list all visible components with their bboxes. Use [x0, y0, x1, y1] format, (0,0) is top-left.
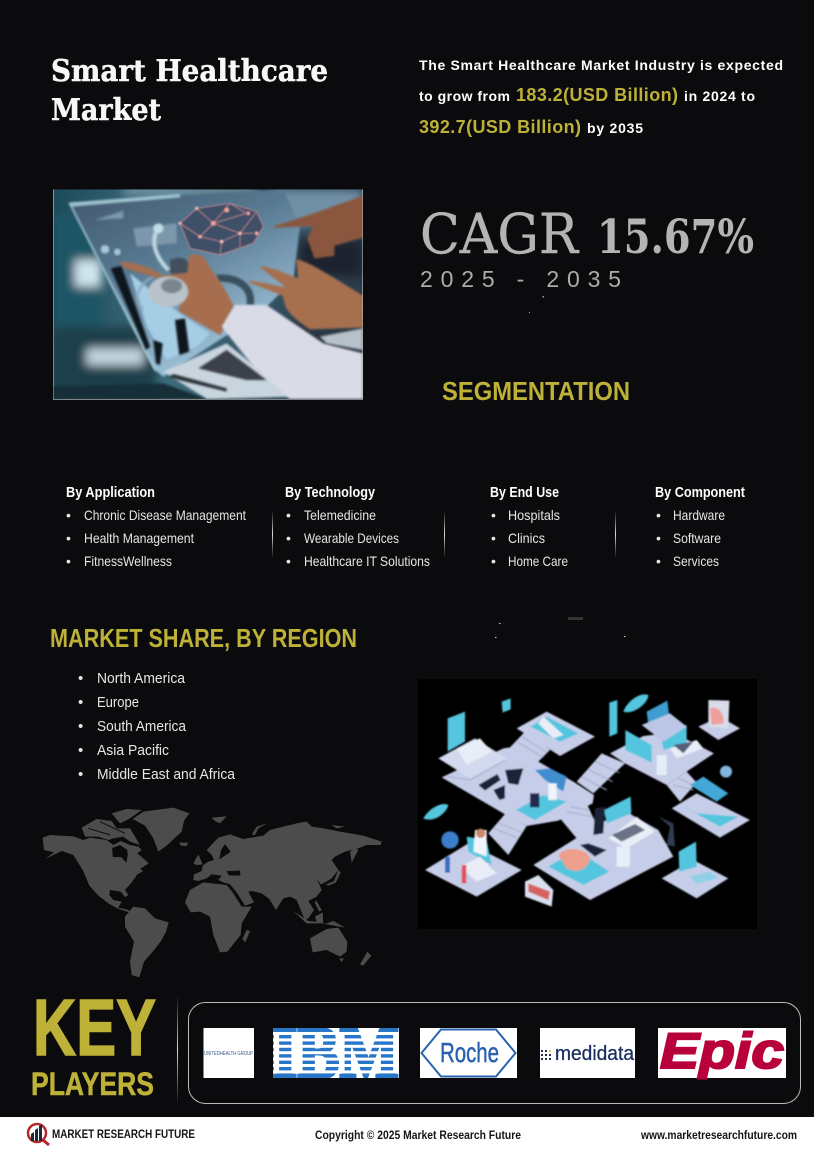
segmentation: by end use: By End Use	[490, 485, 559, 501]
region list: Europe	[97, 694, 139, 711]
eurasia	[193, 822, 382, 920]
region list: Middle East and Africa	[97, 766, 236, 783]
logo: Epic: Epic	[660, 1023, 784, 1079]
white sleeve	[222, 305, 363, 399]
madagascar	[242, 930, 250, 942]
logo: IBM	[273, 1028, 399, 1078]
footer bar	[0, 1117, 814, 1150]
segmentation: by component	[655, 485, 745, 569]
segmentation: by end use: •	[491, 553, 496, 569]
islands of europe and asia	[193, 823, 358, 886]
title	[51, 54, 328, 128]
market forecast text: by 2035	[587, 120, 643, 136]
title: Smart Healthcare	[51, 54, 328, 89]
photo: doctor with stethoscope and laptop	[53, 189, 363, 400]
key players heading	[31, 983, 156, 1102]
screen data marks	[95, 211, 177, 247]
white objects	[457, 700, 729, 882]
region list: •	[78, 670, 83, 687]
iceland and svalbard	[179, 816, 227, 846]
footer bar: Copyright © 2025 Market Research Future	[315, 1128, 521, 1142]
logo: medidata	[540, 1028, 635, 1078]
brain and jar	[558, 849, 590, 871]
region list: •	[78, 718, 83, 735]
logo: Roche: Roche	[440, 1037, 499, 1068]
segmentation: by end use: Clinics	[508, 530, 545, 546]
CAGR figure	[420, 202, 754, 266]
africa	[185, 882, 252, 952]
logo: medidata: medidata	[555, 1043, 635, 1065]
segmentation: by application: •	[66, 507, 71, 523]
south america	[125, 907, 169, 977]
heading: segmentation: SEGMENTATION	[442, 376, 630, 406]
segmentation: by technology: By Technology	[285, 485, 375, 501]
segmentation: by technology: •	[286, 530, 291, 546]
isometric smart healthcare illustration	[418, 679, 757, 929]
region list: •	[78, 766, 83, 783]
seated figures and dark equipment	[478, 742, 693, 857]
right pointing hand	[275, 197, 363, 257]
segmentation: by component: •	[656, 507, 661, 523]
segmentation: by end use: Hospitals	[508, 507, 560, 523]
segmentation: by end use: Home Care	[508, 553, 568, 569]
brain network	[178, 203, 263, 255]
key players heading: KEY	[33, 983, 156, 1072]
segmentation: by component: Software	[673, 530, 721, 546]
market forecast text: to grow from	[419, 88, 510, 104]
specks	[529, 296, 544, 313]
segmentation: by component: Hardware	[673, 507, 725, 523]
laptop screen	[68, 189, 300, 377]
title: Market	[51, 93, 161, 128]
segmentation: by technology: Wearable Devices	[304, 530, 399, 546]
segmentation: by component: •	[656, 553, 661, 569]
footer bar: MARKET RESEARCH FUTURE	[52, 1127, 195, 1141]
region list: •	[78, 742, 83, 759]
CAGR figure: CAGR	[420, 202, 579, 266]
key players heading: PLAYERS	[31, 1066, 154, 1102]
segmentation: by component: •	[656, 530, 661, 546]
stethoscope chest piece	[148, 276, 188, 307]
segmentation: by application: By Application	[66, 485, 155, 501]
segmentation: by technology: Telemedicine	[304, 507, 376, 523]
region list	[78, 670, 236, 783]
segmentation: by technology: •	[286, 507, 291, 523]
logo: unitedhealth group: UNITEDHEALTH GROUP	[204, 1051, 253, 1057]
inland seas	[88, 822, 240, 875]
arctic islands	[82, 809, 142, 845]
segmentation: by end use: •	[491, 507, 496, 523]
hand holding stethoscope	[122, 255, 233, 334]
segmentation: by component: Services	[673, 553, 719, 569]
segmentation: by application	[66, 485, 246, 569]
stair shading	[447, 737, 693, 838]
market forecast text: 183.2(USD Billion)	[516, 85, 678, 105]
people	[473, 830, 487, 857]
segmentation: by application: •	[66, 530, 71, 546]
logo: Roche	[420, 1028, 517, 1078]
segmentation: by technology: Healthcare IT Solutions	[304, 553, 430, 569]
australia and new zealand	[310, 928, 371, 966]
cyan panels and screens	[423, 694, 738, 885]
market forecast text	[419, 57, 783, 137]
right open hand	[250, 261, 363, 328]
region list: North America	[97, 670, 186, 687]
segmentation: by application: FitnessWellness	[84, 553, 172, 569]
stethoscope	[138, 223, 250, 310]
heading: market share by region: MARKET SHARE, BY REGION	[50, 623, 357, 653]
southeast asia islands	[293, 900, 345, 928]
segmentation: by component: By Component	[655, 485, 745, 501]
market forecast text: The Smart Healthcare Market Industry is expected	[419, 57, 783, 73]
north america	[43, 835, 149, 912]
platforms	[425, 712, 750, 900]
logo: unitedhealth group	[204, 1028, 254, 1078]
segmentation: by technology: •	[286, 553, 291, 569]
segmentation: by application: Chronic Disease Management	[84, 507, 246, 523]
logo: IBM: IBM	[273, 1012, 399, 1095]
segmentation: by end use: •	[491, 530, 496, 546]
region list: South America	[97, 718, 187, 735]
market forecast text: in 2024 to	[684, 88, 755, 104]
region list: •	[78, 694, 83, 711]
greenland	[133, 808, 189, 852]
segmentation: by end use	[490, 485, 568, 569]
reflection on screen	[130, 273, 210, 360]
market forecast text: 392.7(USD Billion)	[419, 117, 581, 137]
CAGR period: 2025 - 2035	[420, 266, 621, 292]
region list: Asia Pacific	[97, 742, 169, 759]
laptop base and keyboard	[163, 343, 293, 399]
segmentation: by application: •	[66, 553, 71, 569]
footer logo icon	[28, 1124, 49, 1145]
world map	[43, 808, 382, 977]
segmentation: by application: Health Management	[84, 530, 194, 546]
key players panel	[188, 1002, 800, 1104]
segmentation: by technology	[285, 485, 430, 569]
CAGR figure: 15.67%	[597, 210, 754, 265]
